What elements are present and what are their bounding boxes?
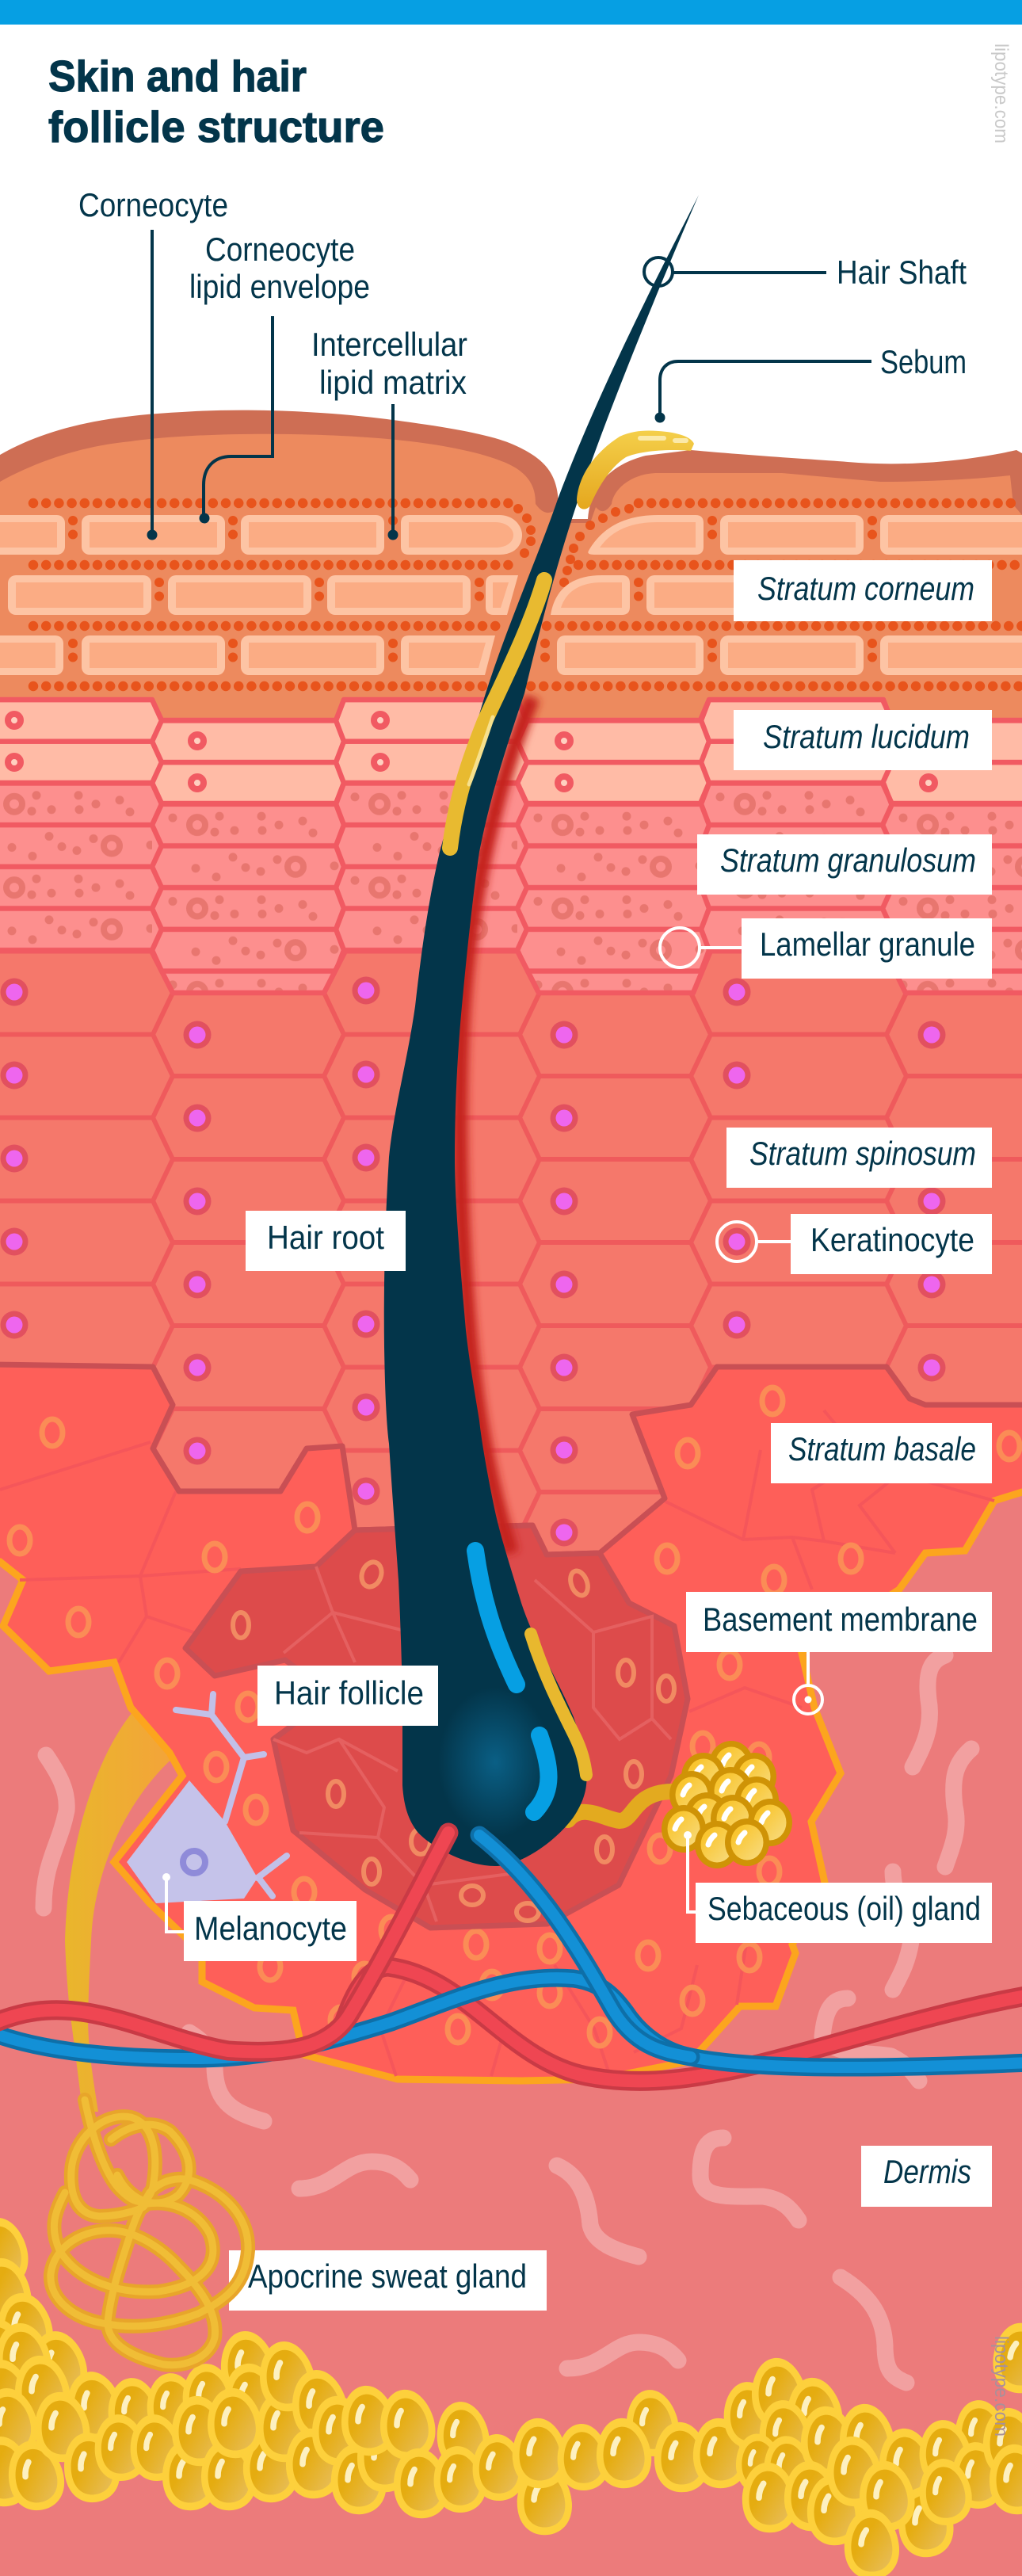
lipid matrix dots xyxy=(33,503,1022,686)
label: Hair Shaft: Hair Shaft xyxy=(837,254,967,291)
label: Melanocyte: Melanocyte xyxy=(194,1910,347,1947)
corneocytes xyxy=(0,515,1022,675)
dermis fibres xyxy=(44,1655,971,2383)
layer: stratum corneum crust xyxy=(0,410,1022,733)
label: Corneocyte lipid envelope: Corneocyte xyxy=(205,231,355,268)
label: Corneocyte lipid envelope xyxy=(189,231,370,523)
label: Apocrine sweat gland: Apocrine sweat gland xyxy=(248,2257,527,2295)
layer: stratum lucidum xyxy=(0,700,1022,803)
keratinocyte nuclei xyxy=(0,976,946,1506)
spinosum cell nucleus at follicle top xyxy=(550,1518,578,1547)
layer: stratum spinosum xyxy=(0,943,1022,1555)
label: Dermis: Dermis xyxy=(883,2153,971,2190)
gold sebum strip on hair xyxy=(450,580,544,848)
label: Lamellar granule: Lamellar granule xyxy=(760,925,975,963)
label: Stratum spinosum xyxy=(726,1128,992,1188)
label: Basement membrane: Basement membrane xyxy=(703,1601,978,1638)
label: Corneocyte lipid envelope: lipid envelope xyxy=(189,268,370,305)
lucidum nuclei xyxy=(8,714,935,789)
layer: stratum granulosum xyxy=(0,773,1022,993)
hair shadow xyxy=(460,697,532,1553)
watermark bottom: lipotype.com xyxy=(990,2336,1012,2437)
label: Basement membrane xyxy=(686,1592,992,1714)
label: Dermis xyxy=(861,2146,992,2207)
sebum on skin xyxy=(577,431,694,509)
label: Keratinocyte: Keratinocyte xyxy=(810,1221,974,1258)
label: Stratum basale xyxy=(771,1423,992,1483)
label: Keratinocyte xyxy=(717,1214,992,1274)
label: Stratum lucidum xyxy=(734,710,992,770)
follicle nuclei xyxy=(233,1559,674,1921)
blue strokes on hair xyxy=(475,1551,549,1812)
layer: dermis background xyxy=(0,1347,1022,2576)
label: Stratum corneum xyxy=(734,560,992,621)
label: Stratum spinosum: Stratum spinosum xyxy=(749,1135,976,1172)
label: Hair root xyxy=(246,1211,406,1271)
label: Apocrine sweat gland xyxy=(229,2250,547,2311)
label: Stratum granulosum xyxy=(697,834,992,895)
label: Stratum corneum: Stratum corneum xyxy=(757,570,974,607)
label: Hair root: Hair root xyxy=(267,1219,384,1256)
apocrine sweat gland coil xyxy=(51,2100,248,2365)
label: Hair Shaft xyxy=(644,254,967,291)
label: Corneocyte: Corneocyte xyxy=(78,186,228,223)
label: Melanocyte xyxy=(162,1873,357,1961)
melanocyte xyxy=(127,1694,287,1903)
layer: stratum corneum body xyxy=(0,434,1022,733)
top bar xyxy=(0,0,1022,25)
label: Intercellular lipid matrix: Intercellular xyxy=(311,326,467,363)
title xyxy=(48,52,384,151)
label: Intercellular lipid matrix: lipid matrix xyxy=(319,364,467,401)
title: Skin and hair xyxy=(48,52,307,101)
label: Stratum basale: Stratum basale xyxy=(788,1430,976,1467)
fat cells xyxy=(0,2214,1022,2576)
basal cell nuclei xyxy=(10,1387,1020,2046)
hair follicle tissue xyxy=(185,1525,688,1928)
sebaceous gland xyxy=(662,1741,792,1868)
gold strip in follicle xyxy=(531,1634,586,1775)
hair xyxy=(384,195,699,1866)
label: Hair follicle: Hair follicle xyxy=(274,1674,424,1712)
title: follicle structure xyxy=(48,102,384,151)
label: Stratum granulosum: Stratum granulosum xyxy=(720,841,976,879)
label: Sebaceous (oil) gland: Sebaceous (oil) gland xyxy=(707,1890,981,1927)
blood vessels xyxy=(0,1833,1022,2081)
sebum highlight xyxy=(640,438,686,441)
label: Lamellar granule xyxy=(660,918,992,979)
apocrine duct xyxy=(65,1708,176,2112)
watermark top: lipotype.com xyxy=(990,44,1012,143)
label: Sebaceous (oil) gland xyxy=(684,1831,992,1943)
sebaceous duct xyxy=(568,1792,671,1821)
strip highlight xyxy=(469,717,493,784)
label: Stratum lucidum: Stratum lucidum xyxy=(763,718,970,755)
hair bulb glow xyxy=(438,1687,552,1838)
label: Hair follicle xyxy=(257,1666,438,1726)
label: Intercellular lipid matrix xyxy=(311,326,467,540)
label: Corneocyte xyxy=(78,186,228,540)
label: Sebum: Sebum xyxy=(880,343,967,380)
layer: stratum basale with basement membrane xyxy=(0,1347,1022,2081)
label: Sebum xyxy=(654,343,967,423)
